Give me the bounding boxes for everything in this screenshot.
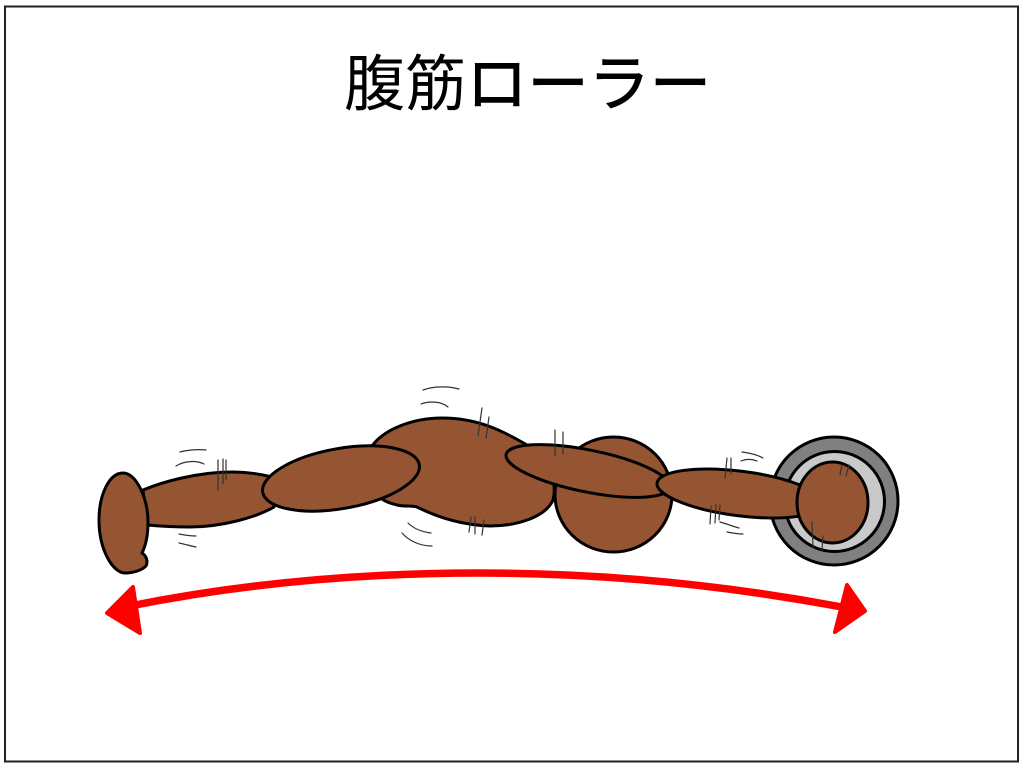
wheel	[770, 437, 898, 565]
torso	[372, 418, 554, 526]
hand	[797, 462, 868, 543]
muscle motion marks	[176, 387, 849, 550]
forearm	[654, 461, 826, 526]
chest	[555, 437, 672, 552]
lower leg	[143, 472, 274, 527]
figure: person on ab roller	[99, 418, 898, 573]
thigh	[257, 435, 425, 522]
foot	[99, 473, 148, 573]
upper arm	[502, 434, 674, 508]
title: 腹筋ローラー	[344, 50, 711, 118]
double-headed range of motion arrow	[107, 573, 865, 633]
